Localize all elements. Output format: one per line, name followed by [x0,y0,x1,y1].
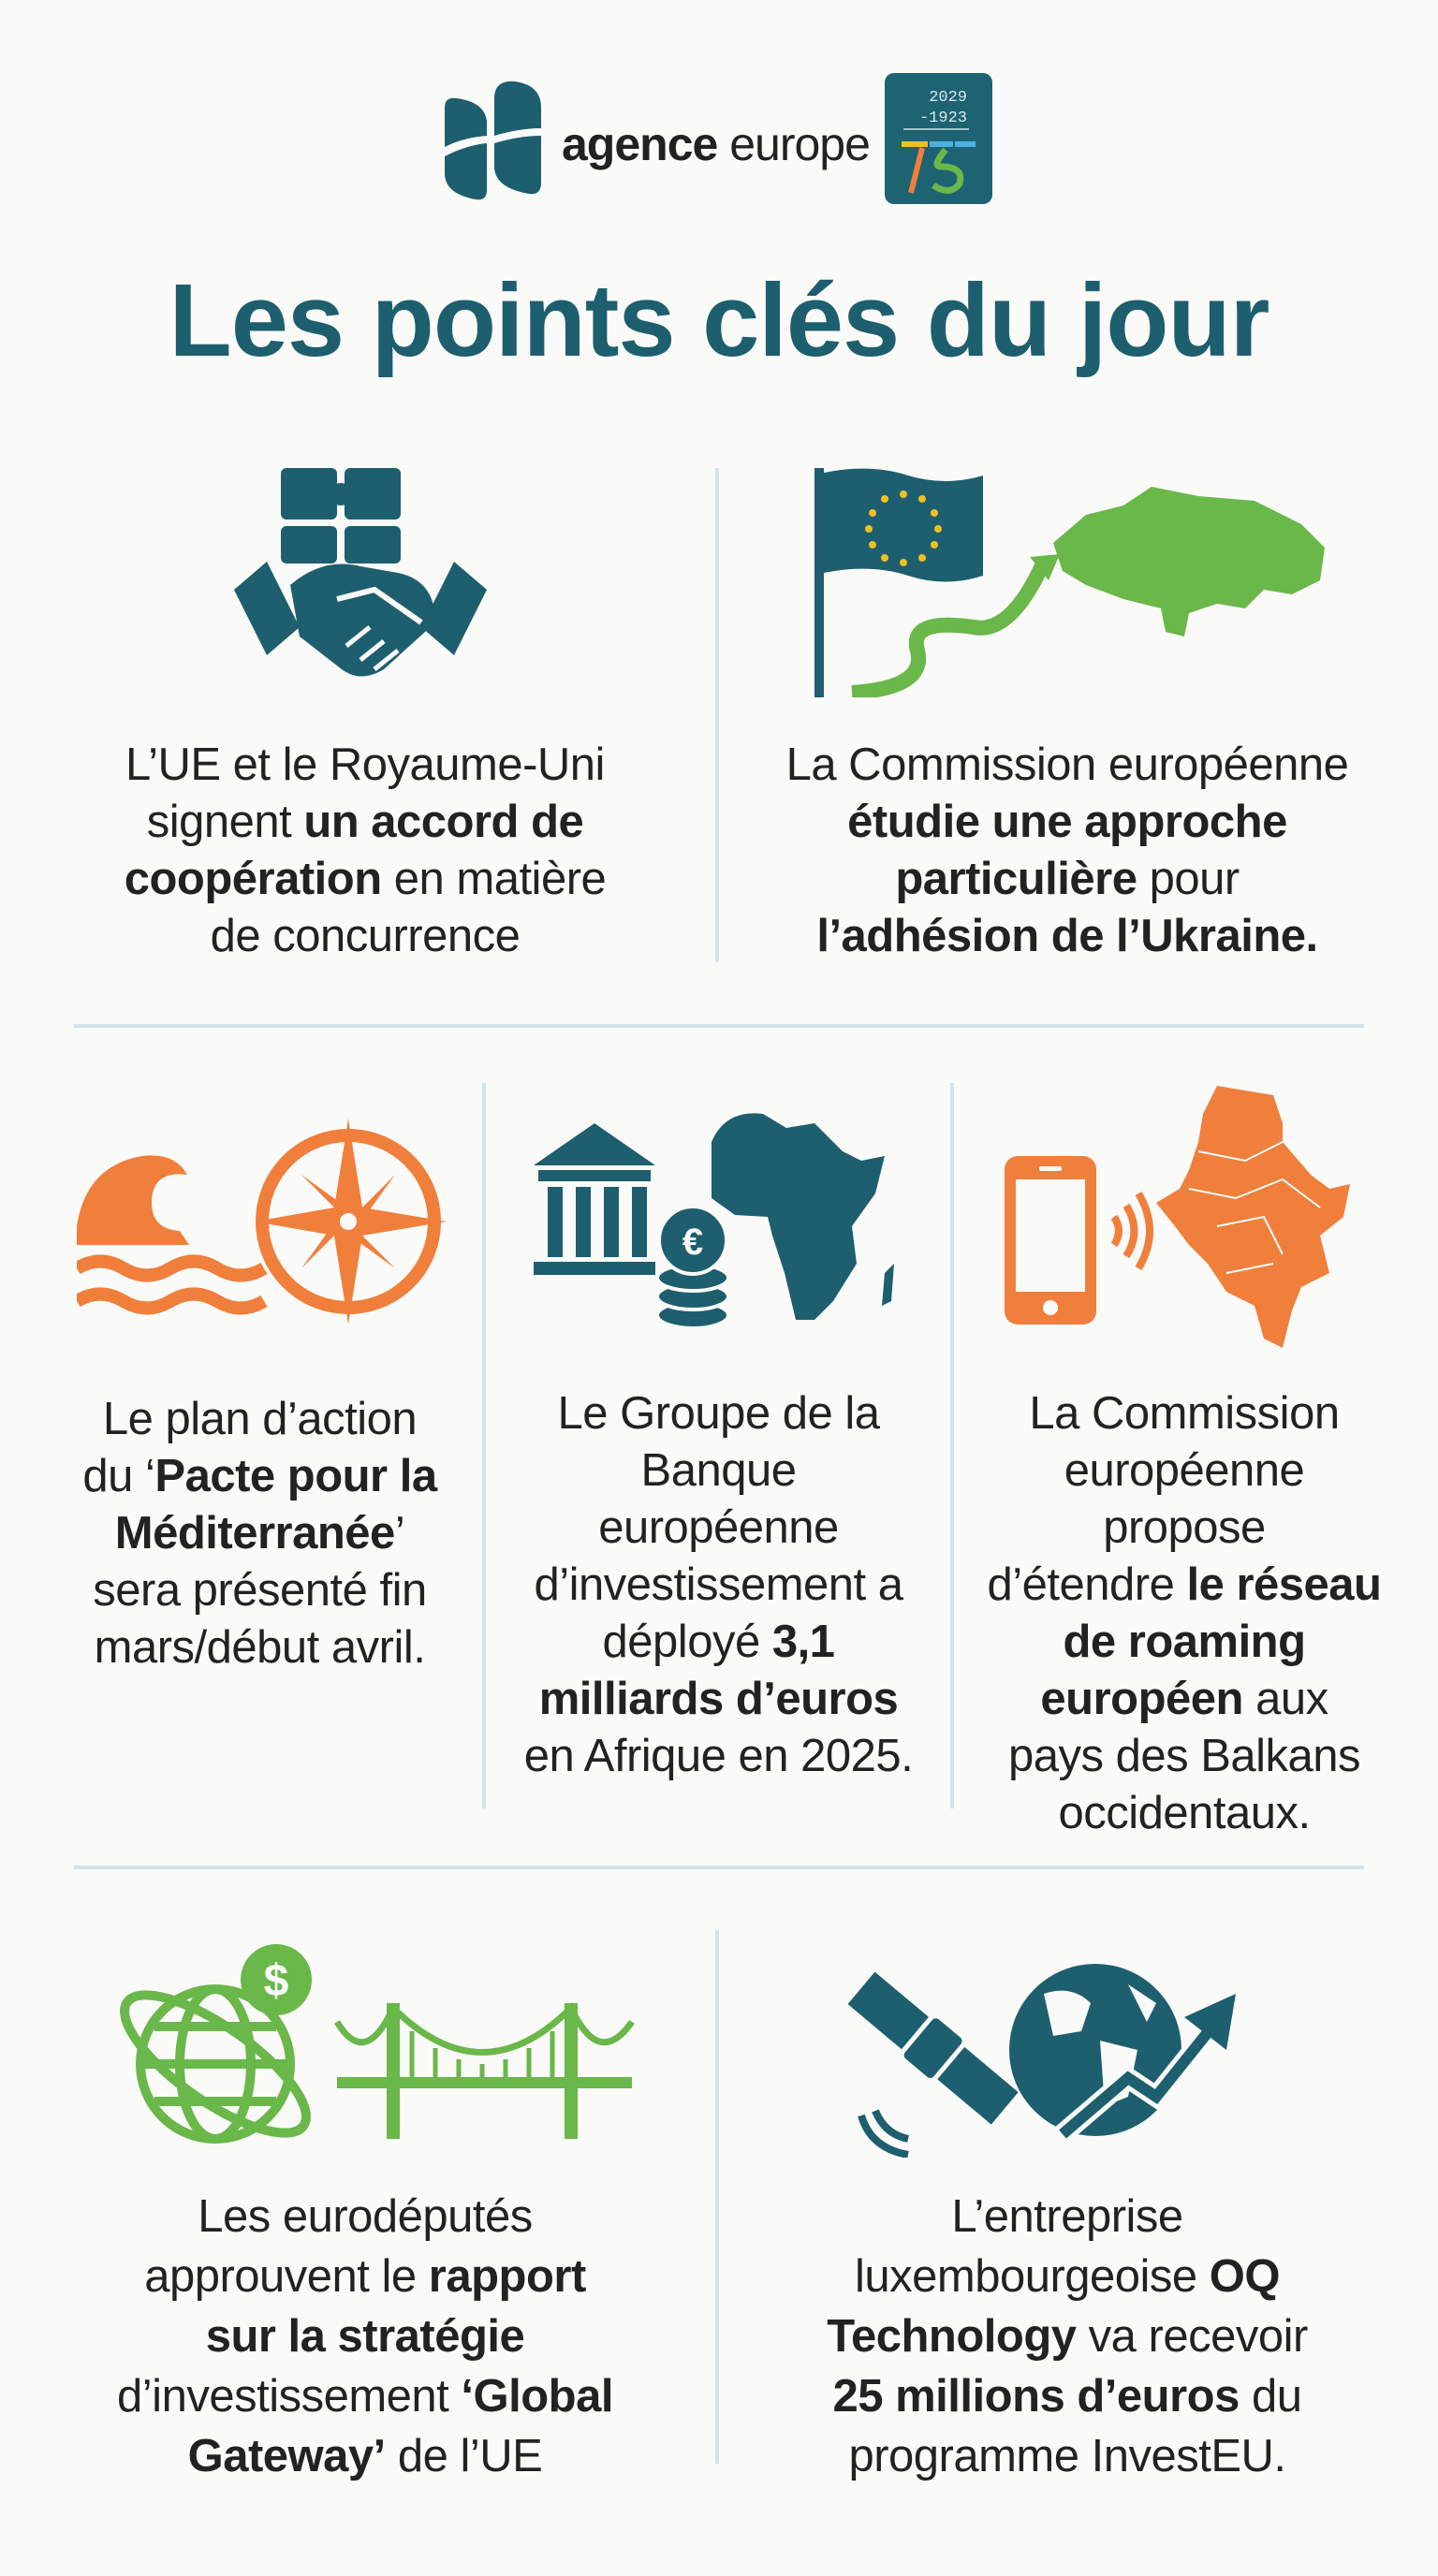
icon: handshake with puzzle [234,468,487,676]
text: Banque européenne: milliards d’euros [539,1674,898,1724]
text: OQ Technology: programme InvestEU. [848,2431,1286,2481]
text: Banque européenne: d’investissement a [534,1559,903,1610]
text: Méditerranée: mars/début avril. [95,1622,425,1673]
text: Global Gateway: Les eurodéputés [198,2191,533,2242]
text: Méditerranée [82,1394,438,1673]
row 3 [117,1944,1308,2481]
text: Méditerranée: du ‘Pacte pour la [82,1451,437,1501]
row 2 [77,1086,1381,1838]
text: UE Royaume-Uni: L’UE et le Royaume-Uni [125,739,605,790]
logo mark [445,80,541,200]
text: OQ Technology: Technology va recevoir [827,2311,1308,2362]
icon: EU flag and Ukraine [814,468,1325,697]
text: Global Gateway: approuvent le rapport [144,2251,586,2302]
text: Méditerranée: sera présenté fin [93,1565,427,1616]
text: roaming: pays des Balkans [1008,1731,1360,1781]
logo text: agence europe [562,118,870,170]
text: UE Royaume-Uni: coopération en matière [125,854,606,904]
text: Méditerranée: Méditerranée’ [115,1508,404,1559]
text: Ukraine [786,739,1348,961]
text: Ukraine: La Commission européenne [786,739,1348,790]
text: Global Gateway: d’investissement ‘Global [117,2371,613,2422]
text: UE Royaume-Uni [125,739,606,961]
text: OQ Technology: luxembourgeoise OQ [855,2251,1280,2302]
text: OQ Technology [827,2191,1308,2481]
text: roaming: La Commission [1029,1388,1340,1439]
text: OQ Technology: L’entreprise [951,2191,1183,2242]
icon: bank, euro coins, Africa: € [682,1222,703,1263]
text: Ukraine: étudie une approche [847,797,1287,847]
text: Global Gateway: Gateway’ de l’UE [188,2431,542,2481]
text: roaming [988,1388,1381,1838]
text: roaming: propose [1103,1502,1266,1553]
text: Banque européenne: déployé 3,1 [603,1617,834,1667]
icon: phone and Balkans [1005,1086,1350,1348]
text: roaming: européen aux [1040,1674,1328,1724]
text: UE Royaume-Uni: signent un accord de [147,797,583,847]
text: Banque européenne [524,1388,913,1781]
text: Banque européenne: européenne [598,1502,839,1553]
text: Banque européenne: Banque [641,1445,796,1496]
icon: globe with dollar and bridge: $ [264,1956,289,2006]
text: Global Gateway: sur la stratégie [206,2311,524,2362]
logo [445,73,992,204]
anniversary badge [885,73,992,204]
icon: wave and compass [77,1119,447,1325]
text: OQ Technology: 25 millions d’euros du [833,2371,1301,2422]
text: roaming: occidentaux. [1058,1788,1311,1838]
text: Banque européenne: Le Groupe de la [558,1388,879,1439]
text: roaming: de roaming [1063,1617,1306,1667]
title: Les points clés du jour [169,263,1269,378]
icon: bank, euro coins, Africa [534,1113,894,1326]
anniversary badge: 2029 [929,89,967,107]
text: Méditerranée: Le plan d’action [103,1394,417,1444]
text: Ukraine: particulière pour [895,854,1240,904]
text: Banque européenne: en Afrique en 2025. [524,1731,913,1781]
text: Ukraine: l’adhésion de l’Ukraine. [816,911,1318,961]
row 1 [125,468,1348,961]
icon: globe with dollar and bridge [120,1944,635,2144]
text: roaming: d’étendre le réseau [988,1559,1381,1610]
icon: satellite, globe, rising arrow [848,1964,1236,2158]
text: roaming: européenne [1064,1445,1304,1496]
text: UE Royaume-Uni: de concurrence [211,911,520,961]
text: Global Gateway [117,2191,613,2481]
anniversary badge: -1923 [919,110,967,127]
